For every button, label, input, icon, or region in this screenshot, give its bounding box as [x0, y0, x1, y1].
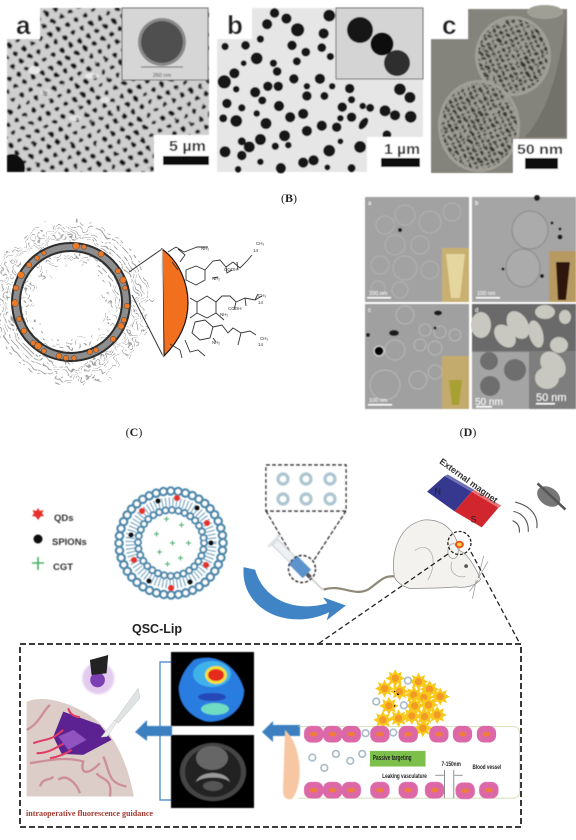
caption C: (C) [126, 425, 142, 439]
formula labels: CH₃ [258, 293, 266, 298]
polymer corona [0, 223, 150, 381]
mouse [324, 520, 488, 599]
formula labels: CH₃ [256, 241, 264, 246]
nanoparticles [309, 677, 411, 771]
brain [27, 699, 134, 796]
outer beads [119, 491, 223, 595]
formula labels: NH₂ [212, 276, 220, 281]
external magnet: N [434, 487, 441, 497]
label b [217, 8, 252, 39]
caption D: (D) [460, 425, 476, 439]
formula labels: NH₂ [220, 312, 228, 317]
arrow: imaging to surgery [135, 720, 172, 741]
formula labels: NH₂ [212, 340, 220, 345]
panel D: four cryo-TEM micrographs [365, 195, 576, 409]
lipid tails [130, 502, 212, 584]
MRI image [171, 735, 254, 808]
panel B-a: micrograph with dark dots: a [16, 10, 31, 40]
leaking vasculature label: Leaking vasculature [382, 773, 427, 780]
orange lens [162, 249, 188, 356]
vessel walls [298, 727, 519, 798]
D-c micrograph [365, 304, 469, 409]
chemical structure [168, 247, 262, 358]
dashed guide lines to detail box [318, 552, 520, 644]
vesicle lower [438, 80, 520, 172]
scale bar 5 um: 5 µm [169, 138, 206, 155]
D-d micrograph: d [475, 308, 478, 314]
scalpel [101, 720, 117, 737]
arrow: vessel to imaging [262, 721, 300, 742]
dashed circle on head [448, 531, 471, 555]
external magnet: S [471, 515, 477, 525]
detail box [20, 644, 521, 827]
injection inset [266, 465, 346, 596]
formula labels: COOH [228, 306, 242, 311]
gap arrows [435, 770, 463, 798]
tumour cells [373, 669, 450, 737]
D-b micrograph [472, 195, 576, 302]
brain surgery illustration [27, 655, 140, 796]
zoom guide lines [266, 511, 346, 560]
D-d micrograph [471, 304, 576, 409]
panel B-b: micrograph with large dark spheres: b [227, 10, 243, 40]
QD markers [131, 495, 210, 591]
legend: CGT: CGT [53, 562, 73, 573]
caption B: (B) [281, 191, 297, 205]
legend: SPIONs: SPIONs [52, 537, 87, 548]
orange lobe [283, 730, 300, 799]
D-a micrograph: 100 nm [369, 291, 388, 297]
bracket [160, 662, 171, 800]
D-a micrograph [365, 197, 469, 302]
D-b micrograph: b [475, 201, 479, 207]
passive targeting label: Passive targeting [373, 755, 412, 762]
signal arcs [513, 502, 537, 533]
formula labels: COOH [224, 267, 238, 272]
SPION markers [128, 498, 214, 584]
gap size label: 7-150nm [442, 761, 461, 768]
fluorescence image [171, 652, 254, 726]
D-d micrograph: 50 nm [536, 392, 567, 404]
vesicle wall ring [12, 243, 130, 361]
scale bar 1 um [367, 137, 423, 173]
endothelial cells [304, 726, 498, 799]
D-c micrograph: c [368, 308, 371, 314]
inset: three spheres [336, 8, 423, 79]
formula labels: 14 [253, 248, 259, 253]
formula labels: 14 [258, 300, 264, 305]
panel B-c: TEM of two filled vesicles: c [442, 10, 456, 40]
blue curved arrow [243, 567, 346, 620]
liposome QSC-Lip [119, 491, 223, 595]
zoom lines [129, 249, 163, 356]
scanner [533, 482, 565, 511]
external magnet [427, 456, 501, 527]
syringe [267, 534, 329, 596]
passive targeting label [370, 751, 426, 767]
panel C: polymer vesicle with magnified wall [0, 223, 268, 381]
formula labels: 14 [258, 342, 264, 347]
blood vessel label: Blood vessel [472, 764, 501, 771]
dashed circle [288, 556, 316, 582]
UV light [82, 662, 114, 694]
formula labels [201, 241, 268, 347]
scale labels: 50 nm [475, 397, 503, 408]
formula labels: CH₃ [260, 336, 268, 341]
dot field [6, 7, 210, 173]
vial a [442, 248, 469, 302]
tumour spot [455, 541, 464, 548]
whiskers [469, 556, 488, 599]
legend: QDs: QDs [54, 513, 74, 524]
scale bar 50 nm [513, 139, 567, 174]
liposome label: QSC-Lip [132, 622, 182, 636]
tail [324, 576, 396, 592]
formula labels: NH₂ [201, 246, 209, 251]
panel B-a: micrograph with dark dots [6, 6, 210, 173]
CGT markers [154, 516, 191, 566]
inset: single nanoparticle [122, 8, 208, 80]
body [394, 520, 481, 588]
surgery caption: intraoperative fluorescence guidance [26, 809, 153, 818]
inner beads [138, 510, 204, 576]
legend [32, 508, 87, 573]
D-a micrograph: a [368, 201, 372, 207]
vial c [442, 356, 469, 409]
tumour drug specks [394, 691, 399, 707]
vial b [549, 251, 576, 302]
D-b micrograph: 100 nm [477, 291, 496, 297]
panel B-c: TEM of two filled vesicles [431, 5, 567, 174]
label a [7, 8, 40, 39]
wireless signal and scanner [513, 482, 565, 533]
vesicle upper [474, 16, 552, 96]
scale bar 5 um [154, 135, 210, 173]
blood vessel with passive targeting [298, 669, 519, 799]
label c [431, 8, 468, 39]
magnet label: External magnet [438, 456, 500, 505]
tumour [53, 712, 112, 755]
inset: single nanoparticle: 260 nm [153, 73, 172, 79]
D-c micrograph: 100 nm [369, 398, 388, 404]
panel B-b: micrograph with large dark spheres [217, 8, 423, 173]
scale bar 50 nm: 50 nm [517, 141, 563, 157]
dashed inset box with vesicles [266, 465, 346, 511]
scale bar 1 um: 1 µm [384, 141, 420, 158]
